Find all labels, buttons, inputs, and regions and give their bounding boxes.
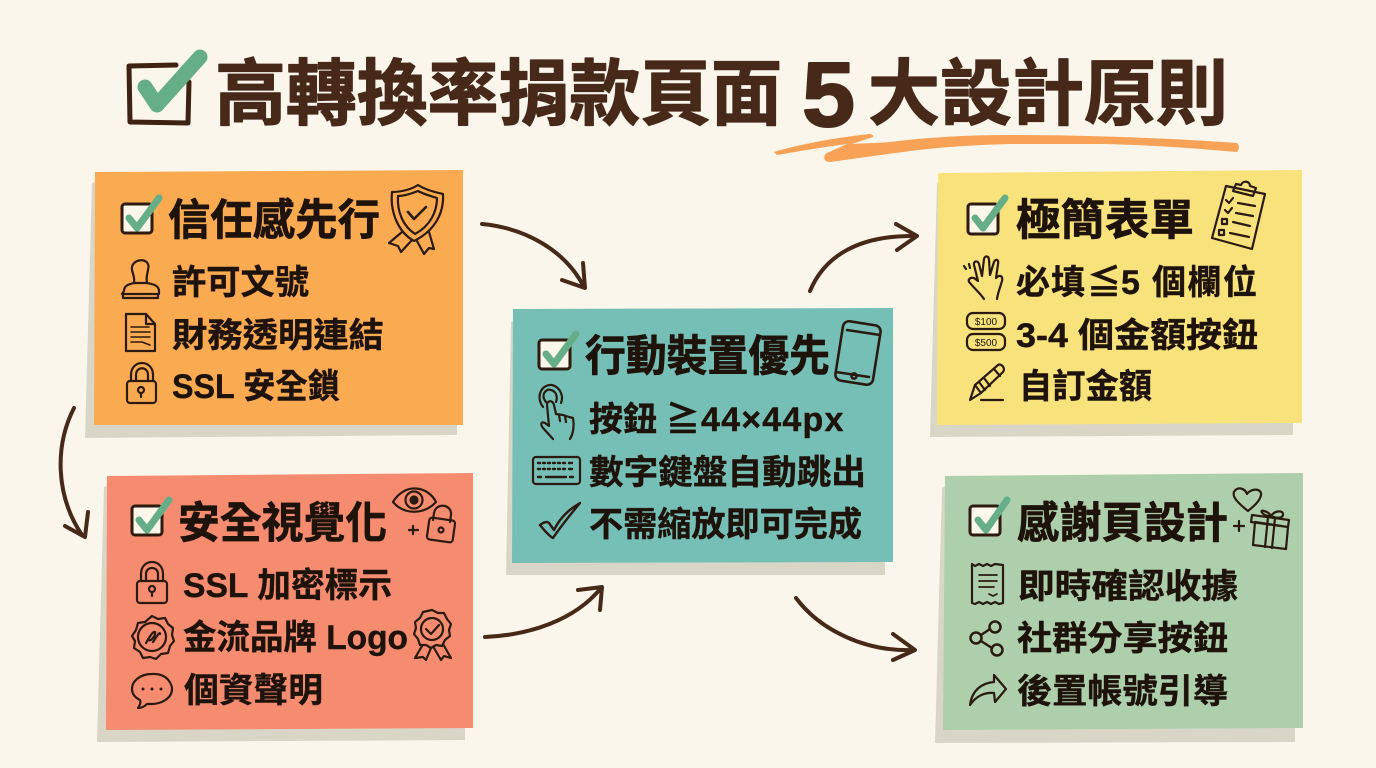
- item: 3-4 個金額按鈕: 3-4 個金額按鈕: [1016, 317, 1258, 355]
- icon: amount buttons: $100: [975, 317, 998, 328]
- item: 不需縮放即可完成: 不需縮放即可完成: [589, 506, 862, 544]
- icon: padlock: [137, 562, 167, 603]
- icon: forward arrow: [970, 675, 1006, 705]
- title: 5: [802, 44, 855, 146]
- arrow: mobile to form: [810, 224, 917, 291]
- icon: keyboard: [533, 457, 580, 484]
- item: 財務透明連結: 財務透明連結: [172, 317, 384, 355]
- arrow: security to mobile: [485, 587, 602, 637]
- heading: 信任感先行: [168, 197, 380, 245]
- icon: amount buttons: [967, 313, 1005, 350]
- heading: 行動裝置優先: [585, 333, 830, 381]
- arrow: mobile to thank-you: [796, 598, 915, 660]
- item: 按鈕 ≧ 44×44px: ≧: [666, 401, 700, 439]
- arrow: trust to mobile: [482, 224, 585, 288]
- checkbox: [968, 198, 1005, 234]
- item: 數字鍵盤自動跳出: 數字鍵盤自動跳出: [589, 454, 866, 492]
- icon: document: [126, 314, 155, 351]
- arrow: trust to security: [61, 408, 88, 537]
- panel: 感謝頁設計: [935, 473, 1303, 743]
- panel: 信任感先行: [85, 170, 463, 438]
- item: 必填 ≦ 5 個欄位: ≦: [1087, 264, 1121, 302]
- heading: 極簡表單: [1016, 197, 1194, 245]
- panel: 安全視覺化: [97, 473, 473, 742]
- panel: 行動裝置優先: [506, 308, 893, 575]
- panel: 極簡表單: [930, 170, 1302, 437]
- icon: share nodes: [970, 622, 1002, 656]
- icon: clipboard checklist: [1212, 182, 1265, 249]
- checkbox: [539, 334, 576, 369]
- icon: shield with ribbons: [389, 185, 443, 254]
- icon: smartphone: [835, 320, 881, 386]
- item: 按鈕 ≧ 44×44px: 按鈕: [589, 401, 657, 439]
- icon: heart plus gift: [1234, 488, 1289, 549]
- icon: brand seal: [132, 616, 174, 659]
- item: 必填 ≦ 5 個欄位: 個欄位: [1152, 264, 1258, 302]
- item: 必填 ≦ 5 個欄位: 必填: [1016, 264, 1086, 302]
- icon: award rosette: [414, 610, 451, 660]
- title underline stroke: [774, 134, 1239, 162]
- icon: amount buttons: $500: [975, 338, 998, 349]
- heading: 安全視覺化: [178, 500, 387, 548]
- item: 必填 ≦ 5 個欄位: 5: [1121, 264, 1140, 302]
- checkbox: [970, 500, 1007, 535]
- icon: pencil: [970, 365, 1004, 400]
- icon: padlock: [127, 363, 156, 403]
- checkbox: [132, 500, 169, 535]
- item: 金流品牌 Logo: 金流品牌 Logo: [183, 619, 408, 657]
- icon: check mark: [540, 503, 580, 538]
- title checkbox icon: [129, 57, 200, 123]
- item: 按鈕 ≧ 44×44px: 44×44px: [701, 401, 845, 439]
- item: 後置帳號引導: 後置帳號引導: [1017, 673, 1228, 711]
- item: SSL 安全鎖: SSL 安全鎖: [172, 368, 340, 406]
- item: 個資聲明: 個資聲明: [184, 672, 323, 710]
- title: 大設計原則: [868, 55, 1228, 135]
- icon: tapping hand: [540, 385, 574, 439]
- item: 許可文號: 許可文號: [172, 264, 309, 302]
- icon: stamp: [122, 260, 159, 298]
- icon: receipt: [972, 564, 1003, 604]
- heading: 感謝頁設計: [1017, 500, 1228, 548]
- item: 自訂金額: 自訂金額: [1019, 368, 1152, 406]
- icon: speech bubble: [132, 674, 172, 708]
- title: [215, 44, 1228, 146]
- item: 社群分享按鈕: 社群分享按鈕: [1017, 620, 1228, 658]
- icon: three fingers hand: [964, 256, 1002, 299]
- checkbox: [122, 198, 159, 233]
- item: SSL 加密標示: SSL 加密標示: [183, 567, 392, 605]
- title: 高轉換率捐款頁面: [215, 55, 782, 135]
- icon: eye plus lock: [393, 488, 455, 543]
- item: 即時確認收據: 即時確認收據: [1018, 568, 1238, 606]
